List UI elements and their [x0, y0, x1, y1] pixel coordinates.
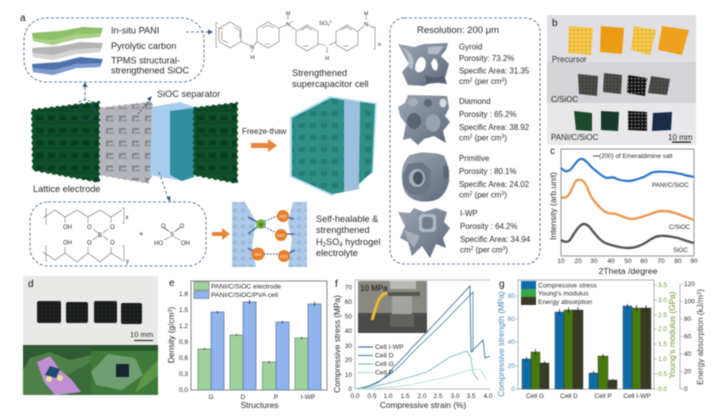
- axis labels: 60: [345, 299, 352, 306]
- right axis: Young's modulus: 0.0: [658, 386, 667, 393]
- legend: [358, 344, 404, 376]
- axes labels: D: [241, 394, 246, 401]
- plot frame: [561, 149, 694, 256]
- axis labels and ticks: 60: [640, 258, 648, 265]
- axis labels and ticks: 80: [674, 258, 682, 265]
- curve labels: PANI/C/SiOC: [652, 182, 689, 189]
- axes labels: 0.9: [179, 339, 188, 346]
- bars: energy absorption: [540, 308, 651, 389]
- sample labels: Precursor: [552, 55, 587, 64]
- right axis: Young's modulus: [654, 282, 677, 393]
- icon: hydrogel network: HO: [279, 214, 287, 220]
- axes labels: 1.5: [179, 307, 188, 314]
- chemical structure: PANI: N: [364, 22, 368, 28]
- axes labels: 0.3: [179, 371, 188, 378]
- axis labels and ticks: Intensity (arb.unit): [548, 172, 558, 240]
- heading: strengthened supercapacitor cell: [292, 68, 369, 89]
- text: Diamond: 3: [501, 134, 504, 140]
- left axis: compressive strength: 80: [508, 293, 515, 300]
- left axis: compressive strength: 20: [508, 363, 515, 370]
- legend: [194, 282, 281, 299]
- icon: PANI layer: [32, 27, 103, 45]
- axes labels: [166, 291, 315, 410]
- panel label c: c: [550, 146, 555, 157]
- legend: Cell I-WP: [375, 344, 404, 351]
- right axis: Young's modulus: Young's modulus (GPa): [667, 291, 677, 379]
- axis labels: 10: [345, 372, 352, 379]
- panel a: schematic: [20, 11, 540, 267]
- axis labels and ticks: 50: [624, 258, 632, 265]
- legend: Cell P: [375, 370, 394, 376]
- photo: sample on flower: [23, 345, 91, 395]
- text: I-WP: cm: [460, 246, 471, 254]
- x labels: Cell I-WP: [623, 393, 651, 400]
- label: hydrogel electrolyte: strengthened: [316, 225, 370, 235]
- PVA borate structure: OH: [63, 225, 72, 231]
- PVA borate structure: O: [110, 240, 115, 246]
- axis labels: 2.0: [417, 393, 427, 400]
- axis labels: 0.5: [367, 393, 377, 400]
- arrow: freeze-thaw: [242, 127, 287, 152]
- icon: hydrogel network: HO: [280, 254, 288, 260]
- PVA borate structure: B: [98, 233, 102, 239]
- chemical structure: PANI: H: [286, 11, 290, 17]
- curve: PANI/C/SiOC: [561, 159, 694, 181]
- label: hydrogel electrolyte: [316, 214, 380, 258]
- PVA borate structure: O: [87, 240, 92, 246]
- text: Primitive: cm: [459, 190, 470, 200]
- text: Diamond: Diamond: [459, 97, 491, 106]
- panel label g: g: [499, 279, 505, 290]
- icon: hydrogel network: HO: [277, 233, 285, 239]
- axis labels: [332, 284, 493, 410]
- bars: Young's modulus: [531, 308, 641, 389]
- inset photo: compression test: 10 MPa: [360, 284, 388, 293]
- label: hydrogel electrolyte: H: [316, 237, 323, 247]
- icon: supercapacitor cell: [290, 96, 377, 196]
- layer labels: TPMS structural-: [111, 56, 180, 66]
- text: Diamond: ): [504, 134, 507, 142]
- label: hydrogel electrolyte: 4: [339, 242, 343, 248]
- axis labels: 2.5: [433, 393, 443, 400]
- chemical structure: PANI: SO: [319, 21, 327, 27]
- icon: lattice electrode left: [32, 102, 99, 182]
- icon: lattice electrode right: [194, 103, 237, 183]
- bars: cell: [211, 302, 321, 390]
- axis labels and ticks: 30: [590, 258, 598, 265]
- sample labels: C/SiOC: [551, 95, 578, 104]
- sample labels: 10 mm: [668, 133, 693, 142]
- icon: Diamond: [398, 95, 450, 145]
- text: Primitive: 2: [470, 191, 473, 197]
- text: I-WP: 3: [502, 246, 505, 252]
- right axis: Young's modulus: 2.5: [658, 312, 667, 319]
- scale bar 10 mm: 10 mm: [130, 330, 153, 339]
- sulfuric acid structure: S: [170, 232, 174, 238]
- label: lattice electrode: Lattice electrode: [33, 184, 100, 194]
- curve labels: [652, 182, 691, 254]
- left axis: compressive strength: 60: [508, 316, 515, 323]
- axes labels: 3: [168, 309, 174, 313]
- inset photo: compression test: [358, 281, 427, 333]
- chemical structure: PANI: N: [286, 22, 290, 28]
- arrow: to PANI structure: [186, 30, 213, 34]
- icon: teal overlap: [170, 108, 194, 181]
- legend: PANI/C/SiOC/PVA cell: [211, 292, 278, 299]
- axis labels and ticks: 70: [657, 258, 665, 265]
- heading: strengthened supercapacitor cell: Strengthened: [292, 68, 347, 78]
- axis labels and ticks: [548, 172, 698, 276]
- text: Diamond: Porosity : 65.2%: [459, 110, 516, 119]
- PVA borate structure: OH: [63, 240, 72, 246]
- panel label f: f: [335, 279, 338, 290]
- text: Primitive: Specific Area: 24.02: [459, 180, 529, 189]
- arrow: dashed to hydrogel box: [159, 172, 170, 202]
- text: Diamond: Specific Area: 38.92: [459, 123, 529, 132]
- legend: Cell D: [375, 352, 394, 360]
- icon: SiOC separator lattice: [100, 102, 152, 183]
- axis labels: Compressive stress (MPa): [332, 295, 342, 393]
- sulfuric acid structure: HO: [154, 241, 163, 247]
- error bars: [204, 300, 314, 363]
- heading: strengthened supercapacitor cell: supercapacitor cell: [292, 79, 369, 89]
- samples: precursor: [568, 26, 689, 55]
- chemical structure: PANI: n: [378, 42, 381, 48]
- callout: layer composition: [24, 18, 204, 82]
- axes labels: Structures: [241, 400, 278, 410]
- icon: hydrogel network: [232, 202, 307, 267]
- panel e: density bar chart: [166, 278, 327, 410]
- callout: hydrogel chemistry: [30, 202, 206, 266]
- arrow: freeze-thaw: Freeze-thaw: [242, 127, 287, 136]
- chemical structure: PANI: 2-: [329, 20, 333, 24]
- error bars: [526, 304, 646, 381]
- PVA borate structure: [43, 208, 129, 265]
- right axis: energy absorption: 80: [684, 316, 692, 323]
- layer labels: strengthened SiOC: [111, 66, 190, 76]
- label: hydrogel electrolyte: SO: [326, 237, 339, 247]
- axis labels: 0: [348, 386, 352, 393]
- text: Diamond: 2: [470, 134, 473, 140]
- right axis: energy absorption: 0: [684, 386, 688, 393]
- right axis: Young's modulus: 1.5: [658, 341, 667, 348]
- sample labels: PANI/C/SiOC: [551, 133, 599, 142]
- axis labels and ticks: 40: [607, 258, 615, 265]
- photo: four black cubes: [37, 301, 142, 324]
- axis labels: 50: [345, 314, 352, 320]
- panel c: XRD chart: [548, 146, 698, 276]
- text: I-WP: I-WP: [460, 209, 478, 218]
- right axis: Young's modulus: 0.5: [658, 371, 667, 378]
- axis labels and ticks: 10: [557, 258, 565, 265]
- text: I-WP: Specific Area: 34.94: [460, 235, 531, 244]
- text: I-WP: [460, 209, 531, 254]
- axes labels: P: [274, 394, 278, 401]
- sulfuric acid structure: OH: [181, 241, 190, 247]
- right axis: energy absorption: 100: [684, 298, 695, 306]
- chemical structure: PANI: H: [364, 11, 368, 17]
- right axis: energy absorption: 20: [684, 368, 692, 376]
- layer labels: In-situ PANI: [111, 26, 159, 36]
- axes labels: Density (g/cm: [166, 313, 176, 363]
- right axis: Young's modulus: 2.0: [658, 326, 667, 333]
- chemical structure: PANI: +: [291, 20, 293, 24]
- curve: Cell G: [355, 351, 478, 389]
- axis labels and ticks: 90: [690, 258, 698, 265]
- axis labels: Compressive strain (%): [380, 400, 466, 410]
- sulfuric acid structure: [154, 224, 190, 247]
- chemical structure: PANI: 4: [327, 23, 329, 27]
- curve: Cell D: [355, 292, 473, 389]
- zoom circle and arrow: [75, 82, 95, 120]
- label: hydrogel electrolyte: electrolyte: [316, 248, 358, 258]
- curve: C/SiOC: [561, 180, 694, 220]
- chemical structure: PANI: [216, 11, 381, 62]
- text: Primitive: Porosity : 80.1%: [459, 167, 516, 176]
- icon: Primitive: [402, 152, 449, 202]
- sulfuric acid structure: O: [180, 224, 184, 230]
- samples: PANI/C/SiOC: [574, 111, 672, 131]
- text: Gyroid: Specific Area: 31.35: [459, 66, 530, 76]
- left axis: compressive strength: 40: [508, 339, 515, 346]
- label: hydrogel electrolyte: Self-healable &: [316, 214, 378, 224]
- panel f: stress-strain chart: [332, 279, 493, 410]
- chemical structure: PANI: N: [250, 45, 254, 51]
- legend: Cell G: [375, 361, 394, 368]
- axes labels: G: [208, 394, 214, 401]
- axes labels: 0.0: [179, 387, 188, 394]
- text: Gyroid: cm: [459, 77, 470, 86]
- curve labels: C/SiOC: [669, 224, 691, 231]
- panel label b: b: [552, 18, 558, 29]
- text: Gyroid: Gyroid: [459, 42, 482, 52]
- axis labels and ticks: 20: [574, 258, 582, 265]
- right axis: energy absorption: 60: [684, 334, 692, 340]
- axis labels: 3.0: [450, 393, 460, 400]
- curve labels: SiOC: [673, 247, 688, 254]
- label: SiOC separator: [138, 89, 220, 114]
- text: Diamond: [459, 97, 529, 142]
- right axis: energy absorption: [680, 281, 705, 393]
- text: Diamond: cm: [459, 134, 470, 142]
- text: I-WP: (per cm: [473, 246, 503, 254]
- legend: Young's modulus: [538, 290, 589, 298]
- text: Diamond: (per cm: [472, 134, 502, 142]
- PVA borate structure: x: [126, 215, 128, 221]
- icon: hydrogel network: OH: [254, 252, 262, 258]
- icon: gel electrolyte block: [150, 102, 194, 181]
- left axis: compressive strength: [496, 291, 518, 397]
- text: Gyroid: ): [504, 77, 507, 86]
- right axis: energy absorption: 40: [684, 351, 692, 358]
- icon: SiOC layer: [32, 57, 103, 75]
- axes labels: 0.6: [179, 355, 188, 362]
- text: Gyroid: (per cm: [472, 77, 502, 86]
- label: hydrogel electrolyte: 2: [323, 242, 327, 248]
- panel b: photo of samples: [547, 15, 696, 145]
- text: I-WP: Porosity : 64.2%: [460, 222, 517, 231]
- text: Gyroid: 2: [470, 78, 473, 84]
- axis labels: 1.5: [400, 393, 410, 400]
- arrow: to hydrogel: [212, 228, 230, 240]
- photo: sample on leaf: [91, 345, 158, 395]
- PVA borate structure: O: [110, 225, 115, 231]
- x labels: Cell G: [526, 393, 544, 400]
- right axis: Young's modulus: 3.5: [658, 282, 667, 289]
- chemical structure: PANI: H: [325, 56, 329, 62]
- plot frame: [355, 280, 490, 389]
- x labels: Cell D: [560, 393, 578, 400]
- right axis: Young's modulus: 1.0: [658, 356, 667, 363]
- text: Primitive: [459, 154, 529, 200]
- text: I-WP: 2: [471, 246, 474, 252]
- bars: compressive stress: [522, 306, 632, 389]
- legend: Compressive stress: [538, 282, 597, 290]
- text: I-WP: ): [505, 246, 508, 254]
- panel: TPMS structures: [390, 18, 540, 264]
- panel label d: d: [28, 279, 34, 290]
- plot frame: [518, 280, 654, 389]
- axis labels: 1.0: [383, 393, 393, 400]
- right axis: energy absorption: 3: [697, 292, 703, 295]
- legend: [521, 281, 597, 306]
- right axis: energy absorption: 120: [684, 281, 695, 288]
- text: Gyroid: 3: [501, 78, 504, 84]
- axis labels: 70: [345, 284, 352, 292]
- sample labels: [551, 55, 693, 142]
- axis labels: 40: [345, 328, 352, 335]
- samples: C/SiOC: [578, 73, 670, 96]
- axis labels and ticks: 2Theta /degree: [599, 266, 658, 276]
- plus sign: +: [139, 229, 144, 238]
- axis labels: 0.0: [350, 393, 360, 400]
- axes labels: 1.8: [179, 291, 188, 298]
- axis labels: 4.0: [483, 393, 493, 400]
- icon: carbon layer: [32, 42, 103, 60]
- layer labels: [111, 26, 190, 76]
- legend: Energy absorption: [538, 299, 593, 306]
- bars: electrode: [198, 335, 308, 390]
- legend: PANI/C/SiOC electrode: [211, 284, 281, 290]
- panel label e: e: [169, 278, 175, 289]
- text: Gyroid: Porosity: 73.2%: [459, 54, 514, 63]
- axes labels: 1.2: [179, 323, 188, 330]
- text: Primitive: Primitive: [459, 154, 490, 163]
- right axis: energy absorption: Energy absorption (kJ/m: [695, 295, 705, 385]
- PVA borate structure: y: [126, 259, 129, 265]
- text: Primitive: 3: [501, 191, 504, 197]
- text: Primitive: (per cm: [472, 190, 502, 200]
- x labels: [526, 393, 651, 400]
- axes labels: I-WP: [301, 394, 315, 401]
- plot frame: [191, 281, 327, 390]
- panel g: mechanical property bars: [496, 279, 705, 400]
- panel label a: a: [20, 13, 26, 24]
- axes labels: ): [166, 306, 176, 309]
- panel d: device photographs: [23, 276, 158, 395]
- text: Gyroid: [459, 42, 530, 86]
- x labels: Cell P: [594, 393, 612, 400]
- left axis: compressive strength: 0: [511, 386, 515, 393]
- left axis: compressive strength: Compressive strength (MPa): [496, 291, 506, 397]
- icon: Gyroid: [398, 43, 449, 86]
- right axis: energy absorption: ): [695, 289, 705, 292]
- layer labels: Pyrolytic carbon: [111, 41, 176, 51]
- curve: Cell P: [355, 369, 487, 389]
- axis labels: 3.5: [466, 393, 476, 400]
- scale bar: [672, 142, 691, 143]
- text: Primitive: ): [504, 190, 507, 200]
- right axis: Young's modulus: 3.0: [658, 297, 667, 304]
- curve: SiOC: [561, 224, 694, 248]
- label: hydrogel electrolyte: hydrogel: [343, 237, 380, 247]
- label: SiOC separator: SiOC separator: [157, 89, 220, 99]
- heading: resolution: Resolution: 200 μm: [417, 25, 499, 36]
- annotation: peak: (200) of Emeraldimine salt: [599, 153, 673, 160]
- PVA borate structure: O: [87, 225, 92, 231]
- curve: Cell I-WP: [355, 286, 490, 389]
- chemical structure: PANI: H: [250, 55, 255, 61]
- axis labels: 30: [345, 343, 352, 350]
- icon: I-WP: [398, 208, 450, 258]
- icon: hydrogel network: B: [260, 222, 263, 228]
- sulfuric acid structure: O: [161, 224, 166, 230]
- axis labels: 20: [345, 357, 352, 364]
